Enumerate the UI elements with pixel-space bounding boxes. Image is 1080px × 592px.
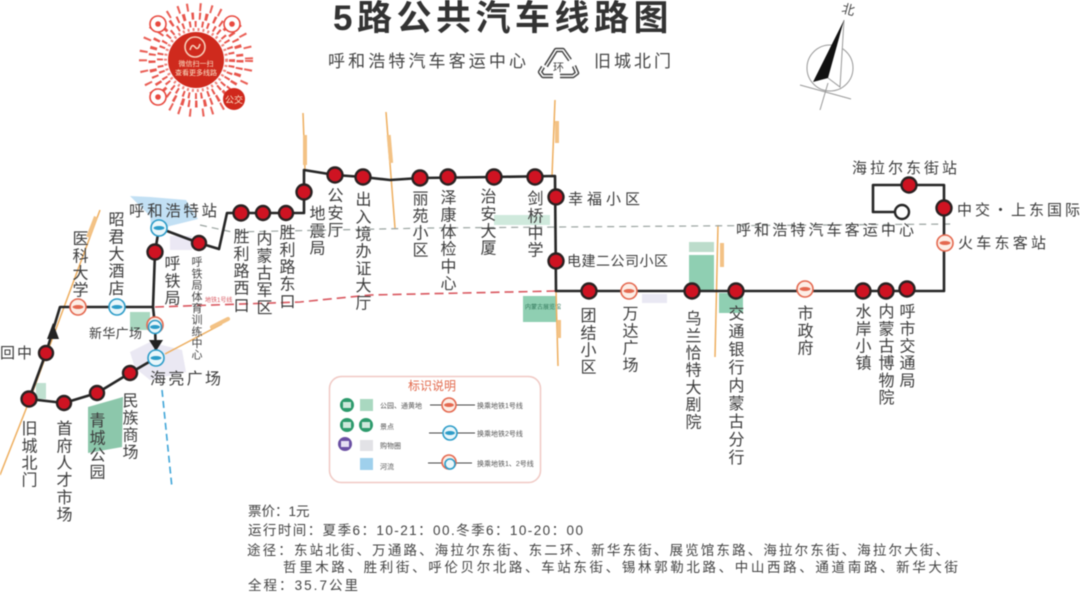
QR centre badge [168,32,224,88]
title: 5路公共汽车线路图 [333,0,673,38]
station labels: vertical: 内蒙古军区 [254,230,272,316]
station labels: vertical: 呼铁局体育训练中心 [190,256,202,360]
station labels: vertical [18,187,916,523]
QR eyes [150,16,240,105]
station labels: vertical: 内蒙古博物院 [876,303,894,406]
legend text: left: 河流 [380,462,394,471]
legend text: left: 公园、通黄地 [380,401,422,410]
map areas: parks, shopping and water [36,196,743,453]
metro transfer stops [70,220,953,366]
dashed line 1 [155,291,556,307]
legend metro keys: 换乘地铁1、2号线 [477,459,534,468]
QR centre badge: 微信扫一扫 [178,59,214,68]
station labels: vertical: 水岸小镇 [852,303,872,372]
route information text: 哲里木路、胜利街、呼伦贝尔北路、车站东街、锡林郭勒北路、中山西路、通道南路、新华大街 [283,559,958,575]
regular stops [22,168,952,410]
route information text: 途径：东站北街、万通路、海拉尔东街、东二环、新华东街、展览馆东路、海拉尔东街、海拉尔大街、 [247,542,949,558]
compass: north arrow: 北 [840,1,857,19]
legend text: left: 景点 [380,423,394,431]
legend metro keys: 换乘地铁2号线 [477,429,523,438]
legend icons [338,398,373,470]
subtitle: route terminals: 旧城北门 [594,52,671,71]
station labels: horizontal: 回中 [0,345,32,362]
station labels: vertical: 首府人才市场 [54,420,72,523]
station labels: vertical: 万达广场 [620,305,638,374]
bus route line [29,170,944,403]
station labels: vertical: 地震局 [306,205,326,257]
map areas: parks, shopping and water: 内蒙古展览馆 [525,303,561,311]
station labels: horizontal: 呼和浩特站 [129,202,217,220]
station labels: vertical: 泽康体检中心 [438,189,456,292]
dashed line 2 [162,390,172,488]
station labels: horizontal: 海拉尔东街站 [852,160,957,177]
station labels: vertical: 青城公园 [86,412,106,481]
station labels: vertical: 治安大厦 [478,188,496,257]
QR bus badge: 公交 [225,94,243,105]
station labels: vertical: 胜利路东口 [276,224,296,310]
station labels: vertical: 市政府 [794,305,814,357]
station labels: horizontal [0,160,1080,388]
subtitle: route terminals [328,50,671,76]
station labels: vertical: 剑桥中学 [524,190,544,259]
legend title: 标识说明 [408,378,456,393]
station labels: vertical: 旧城北门 [18,420,38,489]
icon: circular route triangle: 环 [553,62,564,74]
legend text: left: 购物圈 [380,441,401,450]
station labels: vertical: 团结小区 [578,307,596,376]
station labels: vertical: 民族商场 [120,392,138,461]
icon: circular route triangle [540,50,577,76]
station labels: vertical: 呼市交通局 [896,303,916,389]
station labels: horizontal: 海亮广场 [150,370,221,388]
route information text: 运行时间：夏季6：10-21：00.冬季6：10-20：00 [248,523,583,538]
panel: legend [330,376,540,482]
station labels: vertical: 呼铁局 [162,255,180,307]
station labels: horizontal: 呼和浩特汽车客运中心 [736,222,914,239]
subtitle: route terminals: 呼和浩特汽车客运中心 [328,52,526,71]
QR centre badge: 查看更多线路 [175,68,217,77]
terminal stop [895,205,909,219]
compass: north arrow [800,1,857,110]
station labels: vertical: 出入境办证大厅 [352,191,372,311]
legend metro keys: 换乘地铁1号线 [477,401,523,410]
route information text [247,504,958,592]
station labels: horizontal: 火车东客站 [958,235,1046,252]
station labels: vertical: 昭君大酒店 [106,211,124,297]
roads: orange streets and dashed metro lines: 地铁1号线 [205,296,232,304]
station labels: vertical: 丽苑小区 [410,190,428,259]
station labels: horizontal: 电建二公司小区 [567,253,668,269]
mini-program QR code [143,7,249,113]
station labels: vertical: 医科大学 [70,230,88,299]
legend text: left [380,401,422,471]
station labels: vertical: 交通银行内蒙古分行 [726,305,744,467]
route information text: 票价：1元 [248,504,310,519]
legend metro keys [428,398,534,469]
station labels: horizontal: 中交・上东国际 [957,201,1080,219]
station labels: horizontal: 幸福小区 [568,191,640,208]
icon: direction arrows [47,323,163,351]
station labels: vertical: 胜利路西口 [230,228,250,314]
station labels: horizontal: 新华广场 [89,326,142,341]
roads: orange streets and dashed metro lines [0,100,955,488]
station labels: vertical: 乌兰恰特大剧院 [682,310,702,430]
station labels: vertical: 公安厅 [324,187,344,239]
